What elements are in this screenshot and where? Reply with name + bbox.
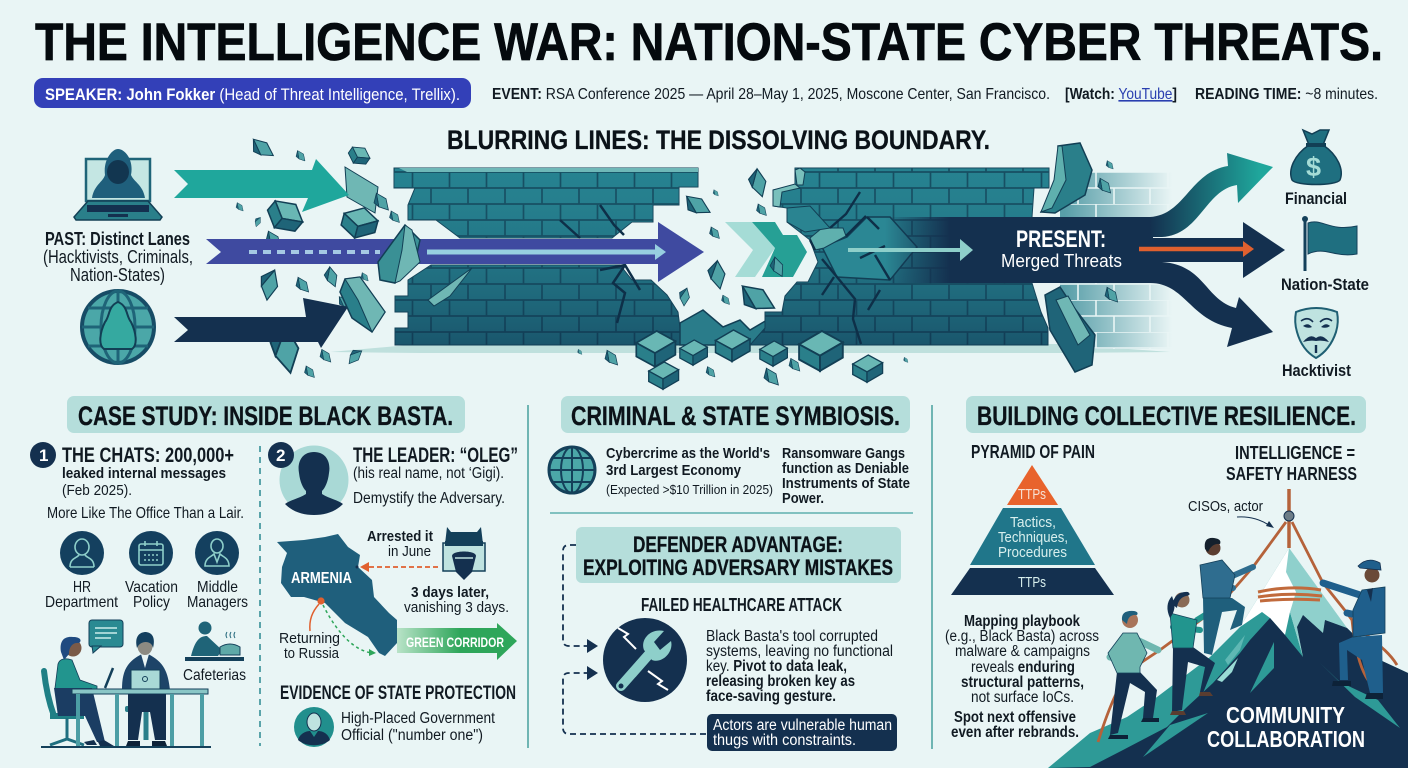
present label [1001,226,1122,271]
climber 3 [1200,538,1253,655]
leader text: Demystify the Adversary. [353,490,505,507]
chats text [47,444,244,522]
leader text [353,444,518,507]
failed attack text: releasing broken key as [706,673,855,690]
community label: COLLABORATION [1207,726,1365,752]
past label: Nation-States) [70,265,165,285]
present label: PRESENT: [1016,226,1106,253]
ransomware text: Instruments of State [782,475,910,492]
chart: pyramid of pain: Tactics, [1010,514,1056,531]
evidence heading: EVIDENCE OF STATE PROTECTION [280,683,516,704]
icon: masked hacker [443,527,485,580]
map: armenia [277,534,397,656]
dashed divider [259,446,261,746]
map: armenia: ARMENIA [291,570,352,587]
callout: vulnerable actors: thugs with constraints. [713,732,856,749]
department labels: Vacation [125,579,178,596]
callout: vulnerable actors [707,714,897,751]
safety harness heading: INTELLIGENCE = [1235,443,1355,463]
panel: symbiosis and defender [549,396,913,751]
symbiosis heading [561,396,910,433]
event details: EVENT: RSA Conference 2025 — April 28–May 1, 2025, Moscone Center, San Francisco. [492,86,1050,103]
label: hacktivist: Hacktivist [1282,361,1351,380]
header info bar [34,78,1378,108]
bottom rubble pile [578,330,908,389]
present label: Merged Threats [1001,251,1122,271]
feedback dashed arrows [563,545,706,734]
three days text: 3 days later, [411,584,489,601]
failed attack heading: FAILED HEALTHCARE ATTACK [641,595,842,615]
reading time: READING TIME: ~8 minutes. [1195,86,1378,103]
column divider left [527,405,529,748]
case study heading: CASE STUDY: INSIDE BLACK BASTA. [78,401,453,431]
watch link: [Watch: YouTube] [1065,86,1177,103]
failed attack text: systems, leaving no functional [706,643,893,660]
returning label [279,630,340,662]
ransomware text [782,445,910,507]
playbook text: reveals enduring [971,659,1075,676]
leader text: THE LEADER: “OLEG” [353,444,518,467]
callout: vulnerable actors: Actors are vulnerable human [713,717,892,734]
flying rubble [236,135,786,378]
badge 2 [268,442,294,468]
returning label: to Russia [284,645,340,662]
hero heading: BLURRING LINES: THE DISSOLVING BOUNDARY. [447,125,990,155]
arrow: green corridor [397,623,517,660]
chart: pyramid of pain [951,465,1114,595]
arrested label [367,528,433,560]
icon: globe with bear [82,291,154,363]
brick wall left half [394,168,767,345]
department labels: Middle [197,579,238,596]
label: financial: Financial [1285,189,1347,208]
ransomware text: Power. [782,490,824,507]
playbook text: not surface IoCs. [971,689,1074,706]
chats text: THE CHATS: 200,000+ [62,444,234,467]
chart: pyramid of pain: Techniques, [998,529,1068,546]
arrow: arrest dashed [356,562,438,572]
official text: High-Placed Government [341,710,496,727]
past label: PAST: Distinct Lanes [45,229,190,249]
icon: broken wrench [603,618,687,702]
icon: official [294,707,334,747]
merged threats band with three outgoing arrows [848,153,1285,347]
failed attack text: Black Basta's tool corrupted [706,628,878,645]
playbook text: malware & campaigns [955,643,1090,660]
badge 1: 1 [39,446,48,465]
falling wall slabs [1041,143,1118,372]
defender heading [576,527,901,583]
column divider right [931,405,933,749]
playbook text: Spot next offensive [954,709,1076,726]
label: nation-state: Nation-State [1281,275,1369,294]
community label: COMMUNITY [1226,702,1345,728]
safety harness heading: SAFETY HARNESS [1226,464,1357,484]
defender heading: DEFENDER ADVANTAGE: [633,532,843,557]
chats text: leaked internal messages [62,465,226,482]
playbook text: even after rebrands. [951,724,1079,741]
past label: (Hacktivists, Criminals, [43,247,193,267]
department labels: HR [73,579,91,596]
cybercrime text: (Expected >$10 Trillion in 2025) [606,482,773,497]
cybercrime text: Cybercrime as the World's [606,445,770,462]
returning label: Returning [279,630,340,647]
ransomware text: function as Deniable [782,460,909,477]
illustration: office scene [41,620,211,747]
icon: flag [1302,216,1357,271]
official text: Official ("number one") [341,727,483,744]
icon: middle manager [195,531,239,575]
department labels: Department [45,594,118,611]
symbiosis heading: CRIMINAL & STATE SYMBIOSIS. [571,401,900,431]
cybercrime text [606,445,773,497]
pyramid heading: PYRAMID OF PAIN [971,442,1095,462]
icon: money bag [1291,130,1341,184]
panel: blurring lines hero [43,125,1369,389]
playbook text: structural patterns, [961,674,1084,691]
speaker pill: SPEAKER: John Fokker (Head of Threat Intelligence, Trellix). [45,85,460,104]
arrow: state lane [174,298,348,348]
icon: hooded figure laptop [74,149,162,220]
ransomware text: Ransomware Gangs [782,445,905,462]
safety harness heading [1226,443,1357,484]
failed attack text [706,628,893,705]
leader text: (his real name, not ‘Gigi). [353,465,504,482]
icon: guy fawkes mask [1295,308,1338,358]
icon: vacation calendar [129,531,173,575]
chats text: More Like The Office Than a Lair. [47,505,244,522]
icon: hr department [60,531,104,575]
badge 2: 2 [276,446,285,465]
climber 1 [1108,611,1159,739]
icon: globe [549,447,595,493]
cybercrime text: 3rd Largest Economy [606,462,742,479]
case study heading [67,396,465,433]
playbook text: Mapping playbook [964,613,1080,630]
arrow: criminal lane through wall [206,222,704,282]
speaker pill [34,78,471,108]
wall shadow [330,344,1170,353]
chart: pyramid of pain: TTPs [1018,486,1046,503]
climber 2 [1167,592,1218,715]
official text [341,710,496,744]
department labels [45,579,248,611]
icon: money bag: $ [1306,152,1321,182]
chats text: (Feb 2025). [62,482,132,499]
past label [43,229,193,285]
department labels: Managers [187,594,248,611]
department labels: Policy [133,594,170,611]
brick wall right half [750,168,1049,345]
cisos annotation: CISOs, actor [1188,498,1263,515]
icon: oleg silhouette [280,446,348,515]
chart: pyramid of pain: TTPs [1018,574,1046,591]
label: cafeterias: Cafeterias [183,667,246,684]
playbook text: (e.g., Black Basta) across [945,628,1099,645]
three days text: vanishing 3 days. [404,599,509,616]
officer [1323,560,1385,699]
cisos annotation [1188,498,1274,528]
three days text [404,584,509,616]
panel: collective resilience [945,396,1408,768]
chevrons through gap [725,222,807,277]
faded bricks right [1059,172,1173,349]
community label [1207,702,1365,752]
failed attack text: face-saving gesture. [706,688,836,705]
failed attack text: key. Pivot to data leak, [706,658,847,675]
badge 1 [30,442,56,468]
chart: pyramid of pain: Procedures [998,544,1067,561]
arrested label: Arrested it [367,528,433,545]
arrow: green corridor: GREEN CORRIDOR [406,634,504,650]
defender heading: EXPLOITING ADVERSARY MISTAKES [583,555,893,580]
arrested label: in June [388,543,431,560]
panel: case study black basta [30,396,518,747]
arrow: hacktivists lane [174,159,349,212]
large stones over arrows [340,225,472,332]
illustration: mountain with climbers [1048,489,1408,768]
playbook text [945,613,1099,741]
illustration: cafeteria [185,622,244,661]
